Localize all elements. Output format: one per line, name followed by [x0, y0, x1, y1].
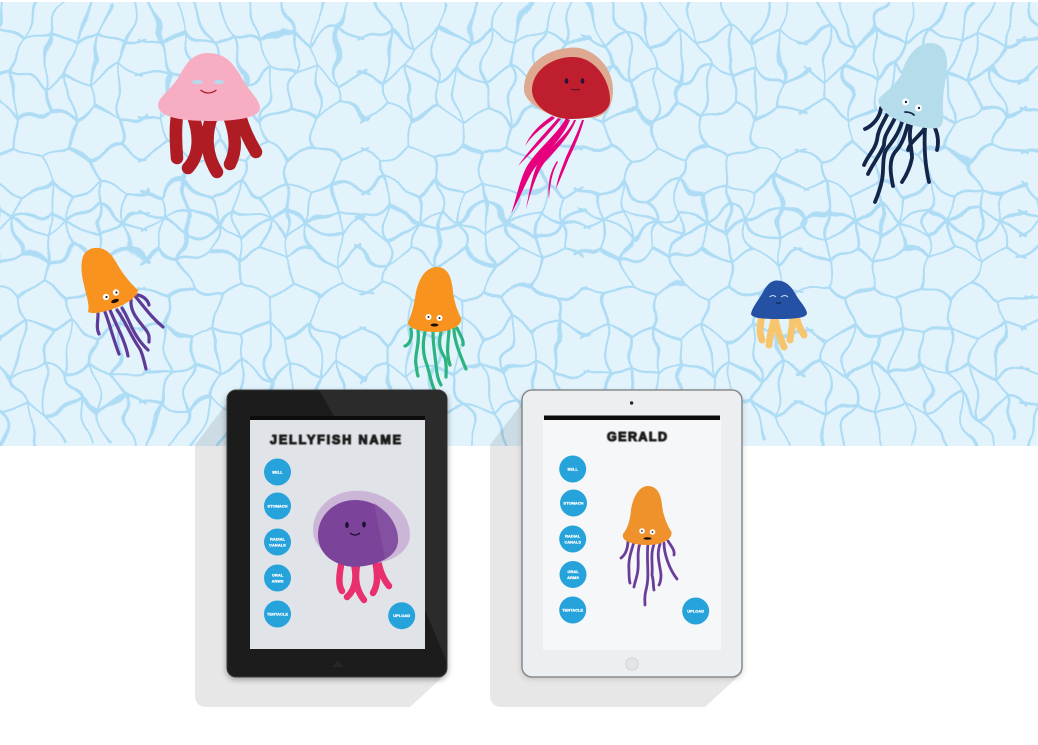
jellyfish: pale blue with navy tentacles — [864, 43, 947, 202]
tablet: white device — [521, 390, 743, 679]
jellyfish: orange with purple tentacles — [81, 248, 163, 369]
button: upload — [388, 602, 415, 629]
button: radial canals: CANALS — [269, 542, 286, 548]
button: stomach: STOMACH — [267, 504, 288, 508]
button: tentacle: TENTACLE — [267, 612, 288, 616]
button: radial canals: RADIAL — [270, 536, 286, 542]
heading: jellyfish name: JELLYFISH NAME — [270, 433, 401, 447]
button: upload: UPLOAD — [393, 613, 410, 618]
tablet shadow: black tablet — [195, 403, 447, 707]
background: cell-pattern water — [0, 0, 1038, 446]
jellyfish: purple preview — [313, 491, 410, 600]
button: stomach: STOMACH — [563, 500, 584, 506]
button: tentacle: TENTACLE — [562, 608, 584, 612]
button: upload: UPLOAD — [687, 608, 704, 614]
tablet: black device — [226, 390, 448, 680]
button: bell — [264, 458, 291, 486]
button: stomach — [560, 490, 587, 516]
button: tentacle — [264, 600, 291, 628]
button: radial canals: RADIAL — [565, 534, 581, 538]
button: oral arms: ARMS — [567, 575, 579, 580]
screen: jellyfish builder — [250, 420, 425, 649]
button: radial canals: CANALS — [564, 540, 581, 544]
heading: Gerald: GERALD — [607, 430, 667, 444]
button: bell — [559, 456, 586, 482]
jellyfish: blue with yellow tentacles — [751, 280, 807, 347]
button: oral arms: ARMS — [272, 578, 284, 584]
jellyfish: Gerald orange with purple tentacles — [621, 486, 677, 605]
jellyfish: red with magenta tentacles — [511, 48, 613, 214]
button: stomach — [264, 492, 291, 520]
jellyfish: pink with red tentacles — [158, 53, 260, 172]
button: upload — [682, 598, 709, 624]
button: oral arms: ORAL — [272, 572, 284, 578]
button: oral arms: ORAL — [567, 569, 579, 574]
button: radial canals — [264, 528, 291, 556]
button: oral arms — [560, 561, 586, 588]
button: radial canals — [559, 526, 586, 552]
button: oral arms — [264, 564, 291, 592]
jellyfish: orange with green tentacles — [405, 267, 466, 389]
button: bell: BELL — [567, 466, 578, 472]
button: bell: BELL — [272, 470, 283, 474]
tablet shadow: white tablet — [490, 403, 742, 707]
button: tentacle — [559, 596, 586, 624]
